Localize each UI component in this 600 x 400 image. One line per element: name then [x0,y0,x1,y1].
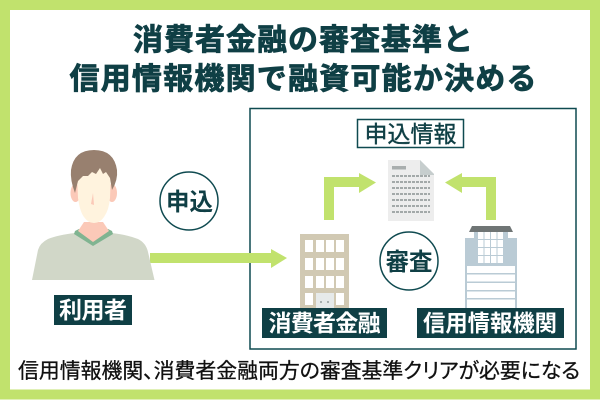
icon: document [388,160,434,221]
title [70,24,536,96]
title: 信用情報機関で融資可能か決める [70,63,536,96]
callout: application: 申込 [166,189,213,216]
arrow: consumer finance to document [324,173,376,220]
icon: user [32,150,154,280]
title: 消費者金融の審査基準と [133,24,473,57]
label: application information: 申込情報 [364,121,456,147]
panel: application review [250,108,576,349]
label: credit bureau: 信用情報機関 [423,310,557,336]
icon: consumer finance building [300,234,349,308]
callout: review: 審査 [386,249,432,276]
icon: credit bureau building [465,226,517,308]
bottom note: 信用情報機関、消費者金融両方の審査基準クリアが必要になる [18,360,580,383]
arrow: credit bureau to document [445,173,496,220]
arrow: user to consumer finance [150,249,287,268]
user label: 利用者 [59,297,127,323]
callout: application [160,172,218,230]
label: consumer finance: 消費者金融 [268,310,380,336]
callout: review [380,232,438,290]
